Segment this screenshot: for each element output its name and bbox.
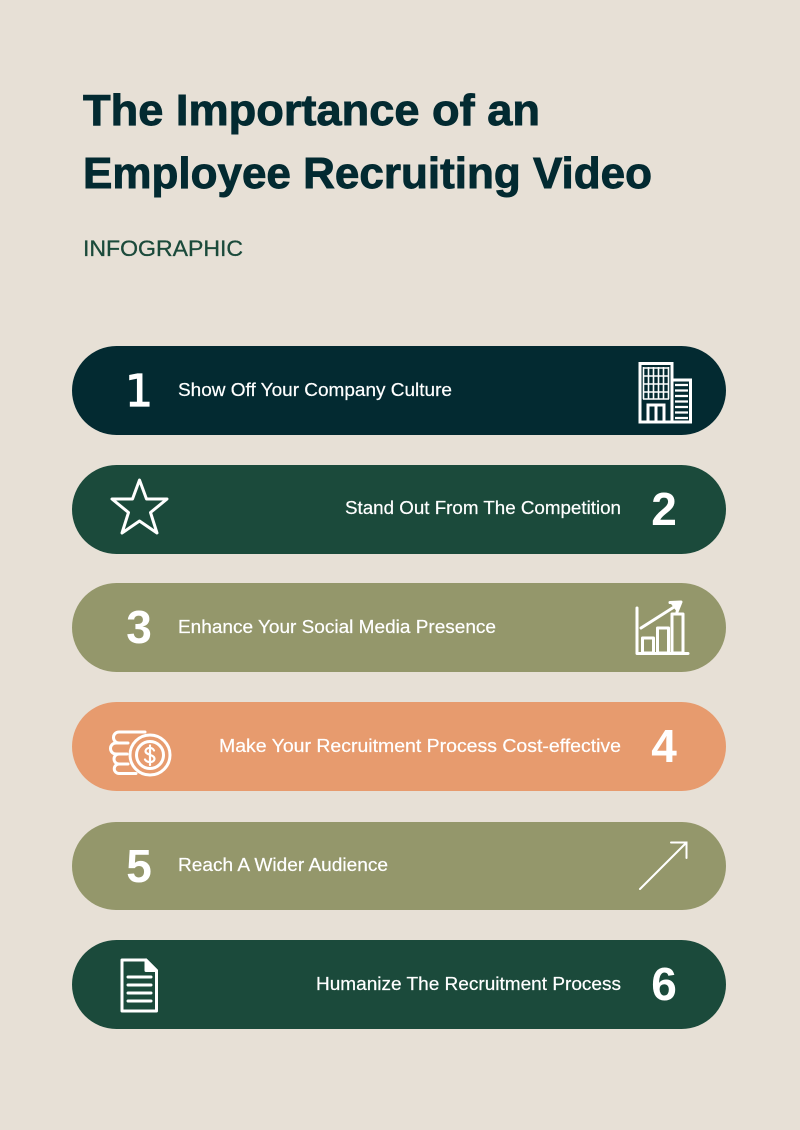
text: item 3: Enhance Your Social Media Presence [178,617,496,637]
number 3: 3 [126,601,152,653]
panel: item 5 [72,822,726,910]
panel: item 3 [72,583,726,672]
number 6: 6 [651,958,677,1010]
number 5: 5 [126,840,152,892]
icon: coins [111,732,170,775]
text: item 1: Show Off Your Company Culture [178,380,452,400]
text: item 4: Make Your Recruitment Process Cost-effective [219,736,621,756]
panel: item 2 [72,465,726,554]
panel: item 1 [72,346,726,435]
title: Employee Recruiting Video [83,149,652,198]
icon: growth chart [637,602,688,654]
text: item 6: Humanize The Recruitment Process [316,974,621,994]
icon: star [112,480,167,533]
panel: item 4 [72,702,726,791]
icon: office buildings [640,364,690,422]
number 4: 4 [651,720,677,772]
number 1: 1 [125,366,153,417]
text: item 5: Reach A Wider Audience [178,855,388,875]
subtitle: INFOGRAPHIC [83,236,243,261]
icon: document [122,960,156,1011]
title [83,86,652,198]
icon: arrow [640,842,686,889]
panel: item 6 [72,940,726,1029]
text: item 2: Stand Out From The Competition [345,498,621,518]
title: The Importance of an [83,86,540,135]
number 2: 2 [651,483,677,535]
